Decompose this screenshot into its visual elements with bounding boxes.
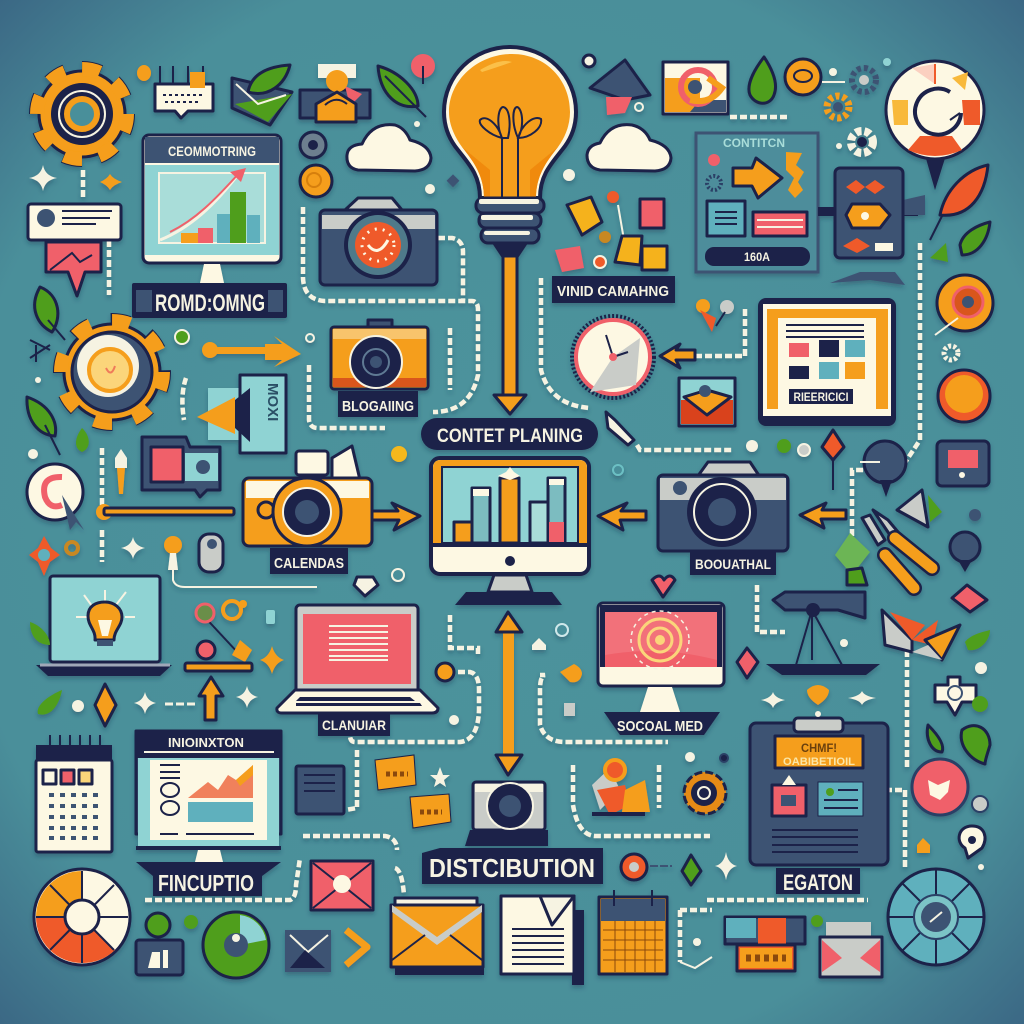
icon: leaf near laptop <box>30 622 50 645</box>
label: FINCUPTIO <box>136 862 281 896</box>
dots near burst <box>685 752 695 762</box>
icon: spiral circle <box>935 275 993 335</box>
icon: big envelope <box>391 898 484 975</box>
icon: dot right <box>449 715 459 725</box>
icon: house dot <box>532 638 546 650</box>
icon: scribble <box>30 340 50 362</box>
icon: dot <box>978 864 984 870</box>
label: VINID CAMAHNG: VINID CAMAHNG <box>557 283 669 300</box>
arrow: left to monitor <box>598 503 646 530</box>
icon: gear top left <box>37 69 127 159</box>
panel: conversion <box>696 133 818 272</box>
icon: orange ball pin <box>164 536 182 570</box>
icon: message card with pointer <box>28 204 121 296</box>
clipboard text: CHMF! <box>801 741 837 755</box>
clipboard subtext: OABIBETIOIL <box>783 756 855 768</box>
icon: puzzle badge <box>935 677 988 715</box>
icon: star mid <box>134 692 156 714</box>
label: BLOGAIING: BLOGAIING <box>342 398 414 415</box>
icon: small pill <box>266 610 275 624</box>
icon: green dot <box>184 915 198 929</box>
label: BOOUATHAL <box>690 551 776 575</box>
icon: green drop leaf <box>749 57 776 103</box>
icon: dark feather <box>830 272 905 285</box>
icon: person <box>136 913 183 975</box>
icon: red target <box>621 854 647 880</box>
icon: diamond gem <box>354 577 378 596</box>
icon: tools cross <box>185 600 252 671</box>
icon: green gem <box>847 568 867 585</box>
icon: leaf lower two <box>961 726 990 764</box>
icon: orange target <box>29 536 60 576</box>
icon: flag panel <box>197 375 286 453</box>
icon: camera orange <box>331 320 428 389</box>
icon: small ring <box>306 334 314 342</box>
label: SOCOAL MED: SOCOAL MED <box>617 718 703 735</box>
small dots top right <box>563 55 891 181</box>
monitor heading: CEOMMOTRING <box>168 143 256 159</box>
icon: green leaf small <box>38 690 62 715</box>
arrow: rod to camera <box>96 504 234 520</box>
icon: leaf upper <box>35 287 65 340</box>
icon: small envelope box <box>679 378 735 426</box>
panel: clipboard <box>750 711 888 865</box>
label: content planning pill <box>421 418 598 450</box>
icon: pencil <box>115 449 127 494</box>
icon: lifebuoy wheel <box>886 61 984 190</box>
icon: small gear <box>720 754 728 762</box>
icon: red swirl circle <box>27 464 84 530</box>
icon: clock <box>572 316 654 398</box>
icon: orange ticket <box>737 945 795 971</box>
icon: camera dark <box>658 462 788 551</box>
icon: white star <box>715 852 737 880</box>
icon: orange connector dot <box>436 663 454 681</box>
label: CLANUIAR <box>318 712 390 736</box>
label: content planning pill: CONTET PLANING <box>437 426 583 447</box>
icon: star right of pin <box>848 691 876 705</box>
icon: star bottom <box>236 686 258 708</box>
icon: star white <box>121 537 145 559</box>
icon: starburst gear <box>684 772 726 814</box>
label: FINCUPTIO: FINCUPTIO <box>158 870 254 896</box>
panel pill value: 160A <box>744 250 770 264</box>
arrow: right to monitor <box>372 503 420 530</box>
icon: calendar <box>36 735 112 852</box>
icon: cloud right <box>587 125 671 171</box>
label: SOCOAL MED <box>604 712 720 735</box>
icon: dash <box>165 702 195 706</box>
icon: leaf lower one <box>927 725 943 752</box>
label: BOOUATHAL: BOOUATHAL <box>695 556 771 572</box>
icon: orange star right <box>260 646 284 674</box>
icon: pliers <box>862 510 932 588</box>
icon: small house <box>917 838 930 853</box>
arrow: bulb to content planning <box>494 256 526 414</box>
panel heading: CONTITCN <box>723 136 785 150</box>
icon: coral laptop <box>277 605 438 713</box>
icon: green dot <box>175 330 189 344</box>
icon: white dot upper <box>975 662 987 674</box>
icon: envelope with card <box>820 922 882 977</box>
dashed connector lines <box>83 117 920 962</box>
icon: image tile <box>663 62 728 114</box>
tablet label: RIEERICICI <box>794 390 848 404</box>
icon: red tag <box>952 585 987 612</box>
icon: orange star <box>100 174 122 190</box>
icon: green paper <box>835 533 870 575</box>
icon: white star <box>29 165 57 191</box>
icon: small camera <box>465 782 548 846</box>
icon: orange card one <box>375 755 416 790</box>
icon: small ring right <box>972 796 988 812</box>
flag text: MOXI <box>264 383 281 421</box>
icon: origami envelope <box>882 610 960 660</box>
icon: cloud left <box>347 125 431 171</box>
icon: leaf envelope <box>232 65 292 125</box>
icon: control panel <box>818 168 925 258</box>
icon: green dot <box>811 915 823 927</box>
icon: telescope <box>766 592 880 675</box>
icon: orange drop connector <box>560 664 582 682</box>
icon: dot and wave <box>680 938 712 968</box>
icon: dark envelope <box>285 930 331 972</box>
label: EGATON: EGATON <box>783 870 853 895</box>
monitor heading: INIOINXTON <box>168 735 244 750</box>
icon: ring small <box>392 569 404 581</box>
monitor: main bar chart <box>431 458 589 605</box>
label: ROMD:OMNG: ROMD:OMNG <box>155 290 265 317</box>
icon: right leaf coral <box>930 165 988 240</box>
icon: decorative dots cluster <box>944 346 958 360</box>
icon: image window <box>142 437 220 497</box>
icon: small tag <box>564 703 575 716</box>
icon: ticket strip <box>725 917 805 944</box>
label: ROMD:OMNG <box>132 283 287 318</box>
icon: orange drop <box>137 65 151 81</box>
icon: pins <box>696 299 734 332</box>
icon: cone <box>897 490 942 527</box>
icon: switch <box>199 534 223 572</box>
double arrow <box>496 612 522 775</box>
icon: mine gear <box>950 509 981 572</box>
icon: red pin <box>411 54 435 84</box>
monitor: growth chart <box>143 135 281 283</box>
icon: white dot <box>72 700 84 712</box>
icon: white gear <box>851 131 873 153</box>
icon: smile spark <box>391 446 407 462</box>
icon: orange planet <box>938 370 990 422</box>
icon: star left of pin <box>761 692 785 708</box>
label: CLANUIAR: CLANUIAR <box>322 717 386 733</box>
icon: tablet <box>758 298 896 426</box>
icon: orange calendar <box>599 890 667 974</box>
icon: knob <box>300 132 326 158</box>
icon: dark gear device <box>860 441 906 497</box>
arrow: gear to camera <box>202 336 301 367</box>
icon: speech bubble <box>959 826 985 858</box>
icon: burst <box>592 760 650 816</box>
icon: orange diamond <box>95 684 116 726</box>
label: BLOGAIING <box>338 391 418 417</box>
icon: document <box>501 896 584 985</box>
icon: bulb laptop <box>36 576 172 676</box>
icon: leaf small right <box>965 630 990 650</box>
icon: coin <box>300 165 332 197</box>
icon: coral monitor <box>598 603 724 712</box>
icon: camera top <box>320 198 437 285</box>
icon: red diamond pin <box>822 430 844 490</box>
label: CALENDAS <box>270 548 348 574</box>
icon: pie wheel <box>34 869 130 965</box>
icon: chevron <box>346 930 367 965</box>
icon: notebook <box>296 766 344 814</box>
row of dots <box>613 439 810 475</box>
icon: dim gear <box>852 68 876 92</box>
label: DISTCIBUTION: DISTCIBUTION <box>429 853 595 883</box>
arrow: up <box>199 677 223 720</box>
icon: red circle <box>912 759 968 815</box>
icon: small orange gear <box>827 96 849 118</box>
icon: red diamond <box>737 648 758 678</box>
icon: lightbulb <box>444 47 576 258</box>
icon: tiny star <box>430 767 450 787</box>
label: VINID CAMAHNG <box>552 276 675 303</box>
monitor: area chart <box>136 731 281 866</box>
icon: person mail <box>300 64 370 122</box>
arrow: left to dark camera <box>800 503 846 528</box>
icon: leaf lower <box>27 397 60 455</box>
arrow: left to clock <box>660 344 695 368</box>
icon: small orange ring <box>66 542 78 554</box>
icon: small screen box <box>937 441 989 486</box>
icon: sticky notes <box>555 191 667 272</box>
icon: donut chart <box>203 912 269 978</box>
icon: orange coin <box>785 59 845 95</box>
icon: green diamond <box>682 855 701 885</box>
icon: coral envelope <box>311 861 373 910</box>
icon: note card <box>155 66 213 118</box>
icon: wrench <box>606 412 634 445</box>
icon: ring <box>556 624 568 636</box>
icon: small dots <box>28 121 459 459</box>
icon: pin orange <box>807 685 829 705</box>
label: CALENDAS: CALENDAS <box>274 555 344 572</box>
icon: heart gem <box>652 576 675 597</box>
icon: stacked papers <box>590 60 650 115</box>
icon: orange card two <box>410 794 451 828</box>
icon: right leaf green <box>930 222 990 262</box>
icon: small leaf <box>76 428 89 452</box>
icon: leaf with stem <box>378 66 426 117</box>
icon: blue wheel <box>888 869 984 965</box>
icon: camera large orange <box>243 446 372 546</box>
connector dash <box>650 865 672 867</box>
icon: gear two <box>61 321 163 423</box>
